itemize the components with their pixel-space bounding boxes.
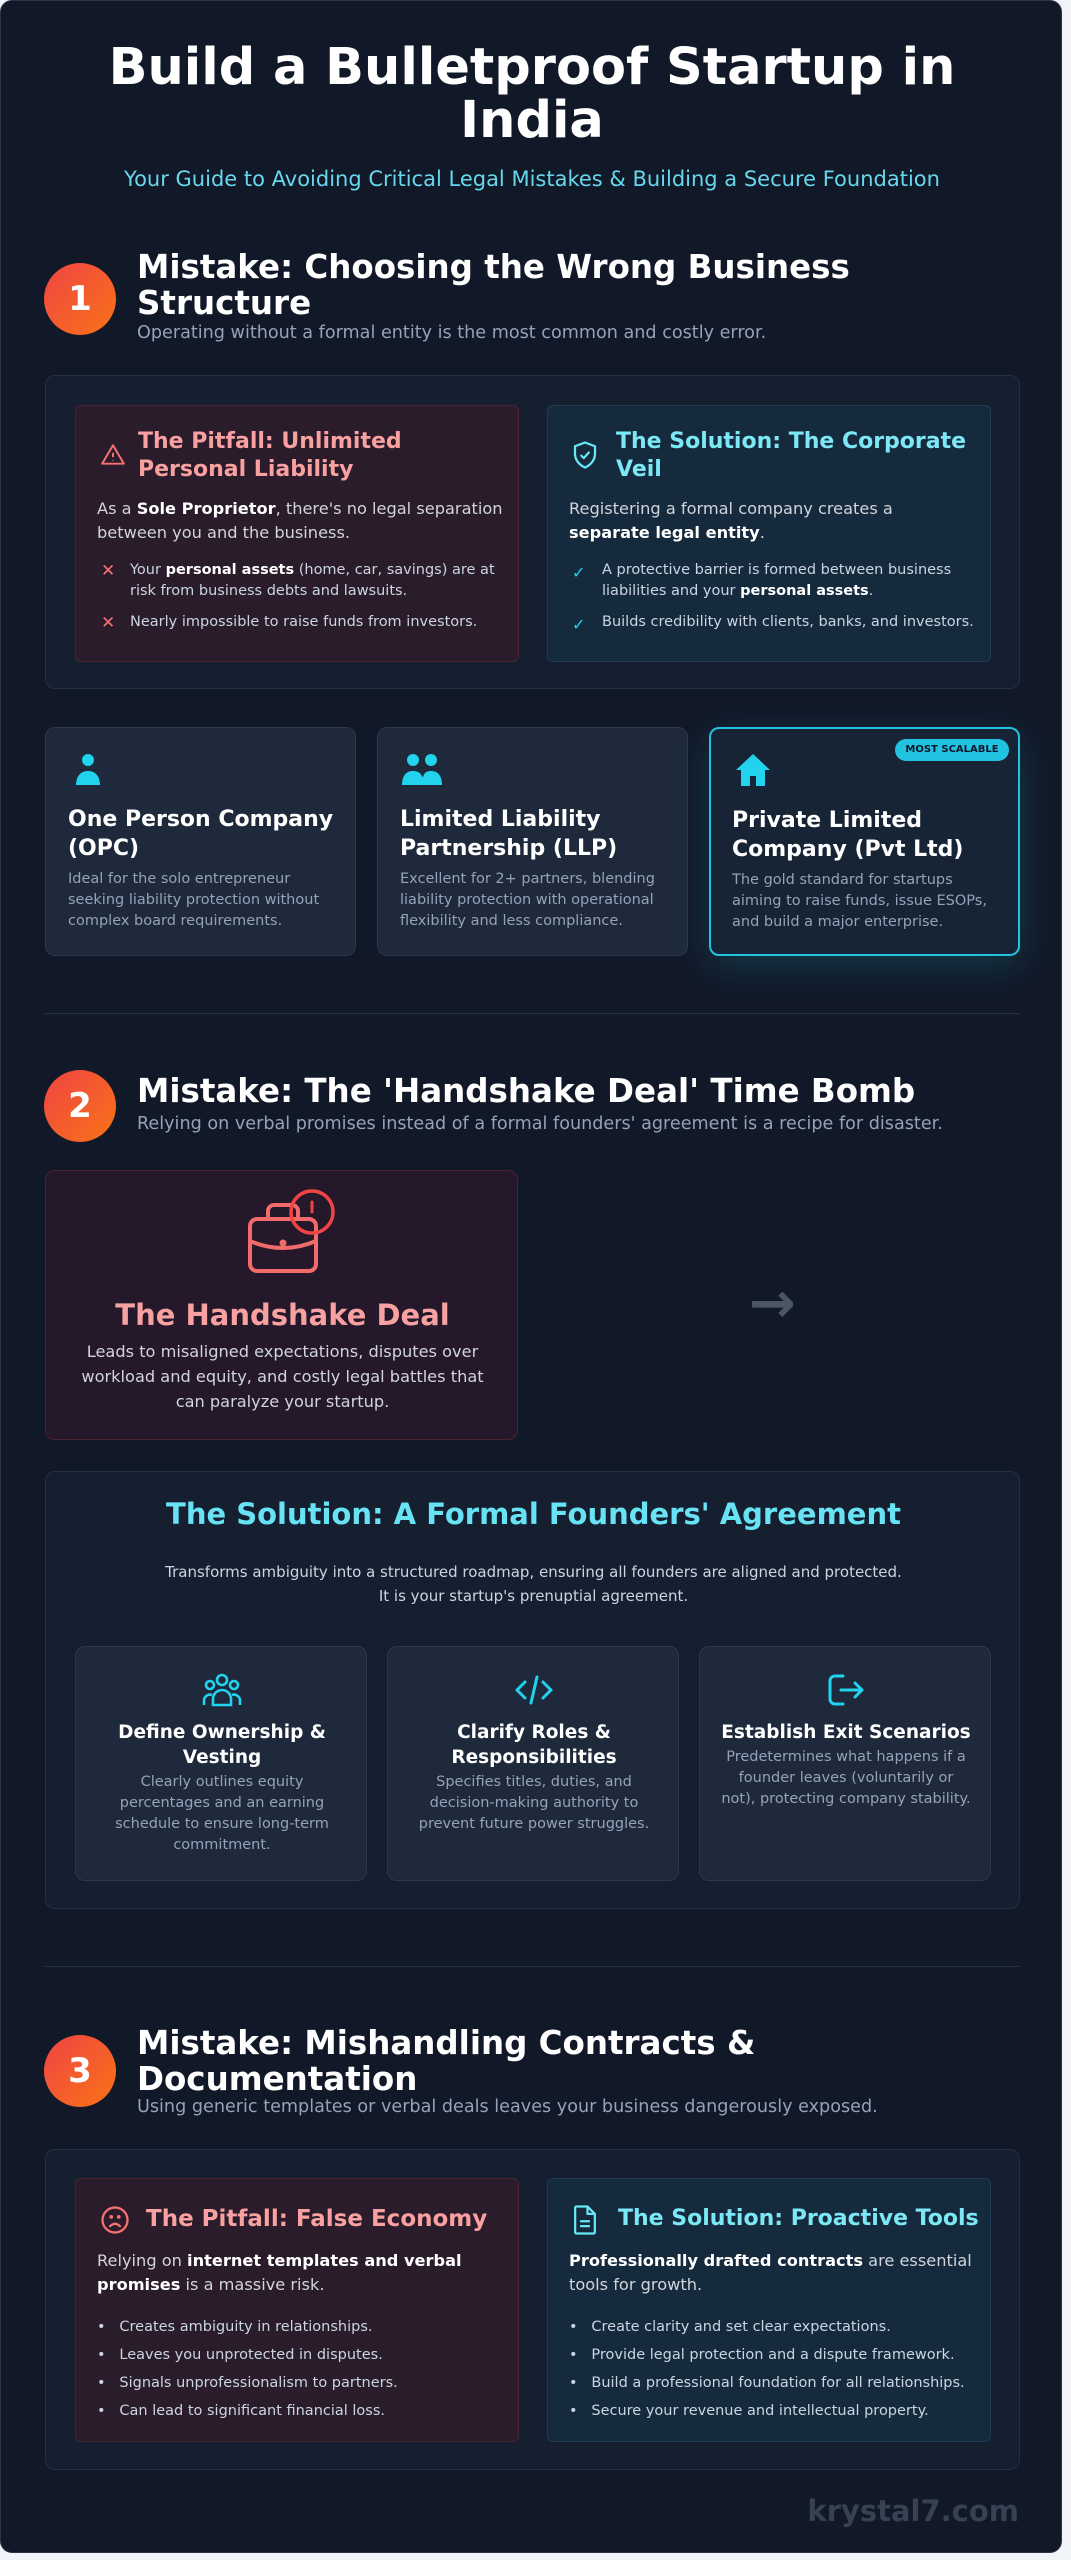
solution bullets: Builds credibility with clients, banks, and investors.	[602, 614, 974, 630]
title: Build a Bulletproof Startup in India	[109, 38, 955, 150]
arrow: →	[749, 1271, 796, 1336]
ownership desc: Clearly outlines equity percentages and an earning schedule to ensure long-term commitment.	[115, 1774, 329, 1853]
card: Pvt Ltd	[709, 727, 1020, 956]
solution bullets: ✓	[572, 615, 585, 634]
section 2 subtitle: Relying on verbal promises instead of a formal founders' agreement is a recipe for disaster.	[137, 1114, 943, 1134]
icon: code	[515, 1676, 553, 1704]
exit desc: Predetermines what happens if a founder leaves (voluntarily or not), protecting company stability.	[721, 1749, 971, 1807]
Pvt Ltd title: Private Limited Company (Pvt Ltd)	[732, 808, 963, 862]
pitfall bullets: • Leaves you unprotected in disputes.	[97, 2347, 383, 2363]
section 3 number badge: 3	[68, 2051, 92, 2091]
footer watermark: krystal7.com	[807, 2494, 1019, 2528]
section 2 heading: Mistake: The 'Handshake Deal' Time Bomb	[137, 1072, 915, 1110]
panel: founders agreement solution	[45, 1471, 1020, 1909]
pitfall bullets: • Signals unprofessionalism to partners.	[97, 2375, 398, 2391]
LLP desc: Excellent for 2+ partners, blending liability protection with operational flexibility and less compliance.	[400, 871, 655, 929]
solution card	[547, 2178, 991, 2442]
Pvt Ltd desc: aiming to raise funds, issue ESOPs,	[732, 893, 987, 909]
solution bullets: • Provide legal protection and a dispute framework.	[569, 2347, 955, 2363]
card: ownership	[75, 1646, 367, 1881]
icon: briefcase alert	[248, 1189, 335, 1273]
solution bullets	[569, 2319, 965, 2419]
solution body: separate legal entity.	[569, 523, 765, 542]
handshake desc: Leads to misaligned expectations, disputes over workload and equity, and costly legal battles that can paralyze your startup.	[81, 1342, 484, 1411]
pitfall body: Relying on internet templates and verbal promises is a massive risk.	[97, 2251, 462, 2294]
section 3 heading: Mistake: Mishandling Contracts & Documentation	[137, 2024, 755, 2098]
pitfall body: As a Sole Proprietor, there's no legal separation between you and the business.	[97, 499, 502, 542]
pitfall bullets: ✕	[101, 561, 115, 581]
card: OPC	[45, 727, 356, 956]
section 2 number badge	[44, 1070, 116, 1142]
exit title: Establish Exit Scenarios	[721, 1722, 971, 1743]
pitfall bullets: Your personal assets (home, car, savings) are at risk from business debts and lawsuits.	[130, 562, 495, 599]
solution description	[165, 1563, 902, 1605]
pitfall bullets: ✕	[101, 613, 115, 633]
pitfall card	[75, 405, 519, 662]
solution body: Professionally drafted contracts are essential tools for growth.	[569, 2251, 972, 2294]
solution description: It is your startup's prenuptial agreement.	[379, 1587, 688, 1605]
pitfall heading: The Pitfall: Unlimited Personal Liability	[138, 429, 402, 482]
card: exit	[699, 1646, 991, 1881]
badge: most scalable: MOST SCALABLE	[905, 744, 999, 755]
solution body	[569, 499, 893, 542]
badge: most scalable	[895, 739, 1009, 761]
pitfall heading: The Pitfall: False Economy	[146, 2206, 487, 2232]
solution bullets	[572, 562, 974, 634]
handshake title: The Handshake Deal	[115, 1298, 450, 1332]
pitfall bullets: • Can lead to significant financial loss.	[97, 2403, 385, 2419]
solution heading: The Solution: A Formal Founders' Agreement	[166, 1497, 901, 1531]
solution heading: The Solution: Proactive Tools	[618, 2206, 979, 2231]
section 3 number badge	[44, 2035, 116, 2107]
panel: structure comparison	[45, 375, 1020, 689]
solution bullets: A protective barrier is formed between business liabilities and your personal assets.	[602, 562, 951, 599]
OPC desc: Ideal for the solo entrepreneur seeking liability protection without complex board requirements.	[68, 871, 319, 929]
card: LLP	[377, 727, 688, 956]
icon: shield	[574, 441, 596, 469]
solution bullets: • Secure your revenue and intellectual property.	[569, 2403, 929, 2419]
icon: sad face	[101, 2206, 129, 2234]
section 3 subtitle: Using generic templates or verbal deals leaves your business dangerously exposed.	[137, 2097, 878, 2117]
pitfall bullets: • Creates ambiguity in relationships.	[97, 2319, 372, 2335]
icon: document	[574, 2205, 596, 2235]
solution bullets: • Build a professional foundation for all relationships.	[569, 2375, 965, 2391]
subtitle: Your Guide to Avoiding Critical Legal Mistakes & Building a Secure Foundation	[124, 167, 940, 191]
roles title: Clarify Roles & Responsibilities	[451, 1722, 617, 1768]
ownership title: Define Ownership & Vesting	[118, 1722, 326, 1768]
solution description: Transforms ambiguity into a structured roadmap, ensuring all founders are aligned and protected.	[165, 1563, 902, 1581]
solution body: Registering a formal company creates a	[569, 499, 893, 518]
icon: warning	[101, 444, 125, 465]
Pvt Ltd desc: and build a major enterprise.	[732, 914, 943, 930]
card: roles	[387, 1646, 679, 1881]
section 1 number badge	[44, 263, 116, 335]
icon: house	[736, 754, 770, 786]
Pvt Ltd desc: The gold standard for startups	[732, 872, 953, 888]
section 1 number badge: 1	[68, 279, 92, 319]
icon: group	[202, 1674, 242, 1706]
section 1 heading: Mistake: Choosing the Wrong Business Structure	[137, 248, 850, 322]
pitfall bullets	[101, 561, 495, 633]
LLP title: Limited Liability Partnership (LLP)	[400, 807, 617, 861]
icon: person	[76, 754, 100, 785]
icon: people	[402, 754, 442, 785]
solution bullets: • Create clarity and set clear expectations.	[569, 2319, 891, 2335]
OPC title: One Person Company (OPC)	[68, 807, 333, 861]
handshake deal card	[45, 1170, 518, 1440]
section 2 number badge: 2	[68, 1086, 92, 1126]
solution heading: The Solution: The Corporate Veil	[616, 429, 966, 482]
solution card	[547, 405, 991, 662]
solution bullets: ✓	[572, 563, 585, 582]
section 1 subtitle: Operating without a formal entity is the most common and costly error.	[137, 323, 766, 343]
pitfall card	[75, 2178, 519, 2442]
icon: exit	[828, 1674, 864, 1706]
roles desc: Specifies titles, duties, and decision-making authority to prevent future power struggles.	[419, 1774, 649, 1832]
panel: contracts	[45, 2149, 1020, 2470]
Pvt Ltd desc	[732, 872, 987, 930]
pitfall bullets: Nearly impossible to raise funds from investors.	[130, 614, 477, 630]
pitfall bullets	[97, 2319, 398, 2419]
